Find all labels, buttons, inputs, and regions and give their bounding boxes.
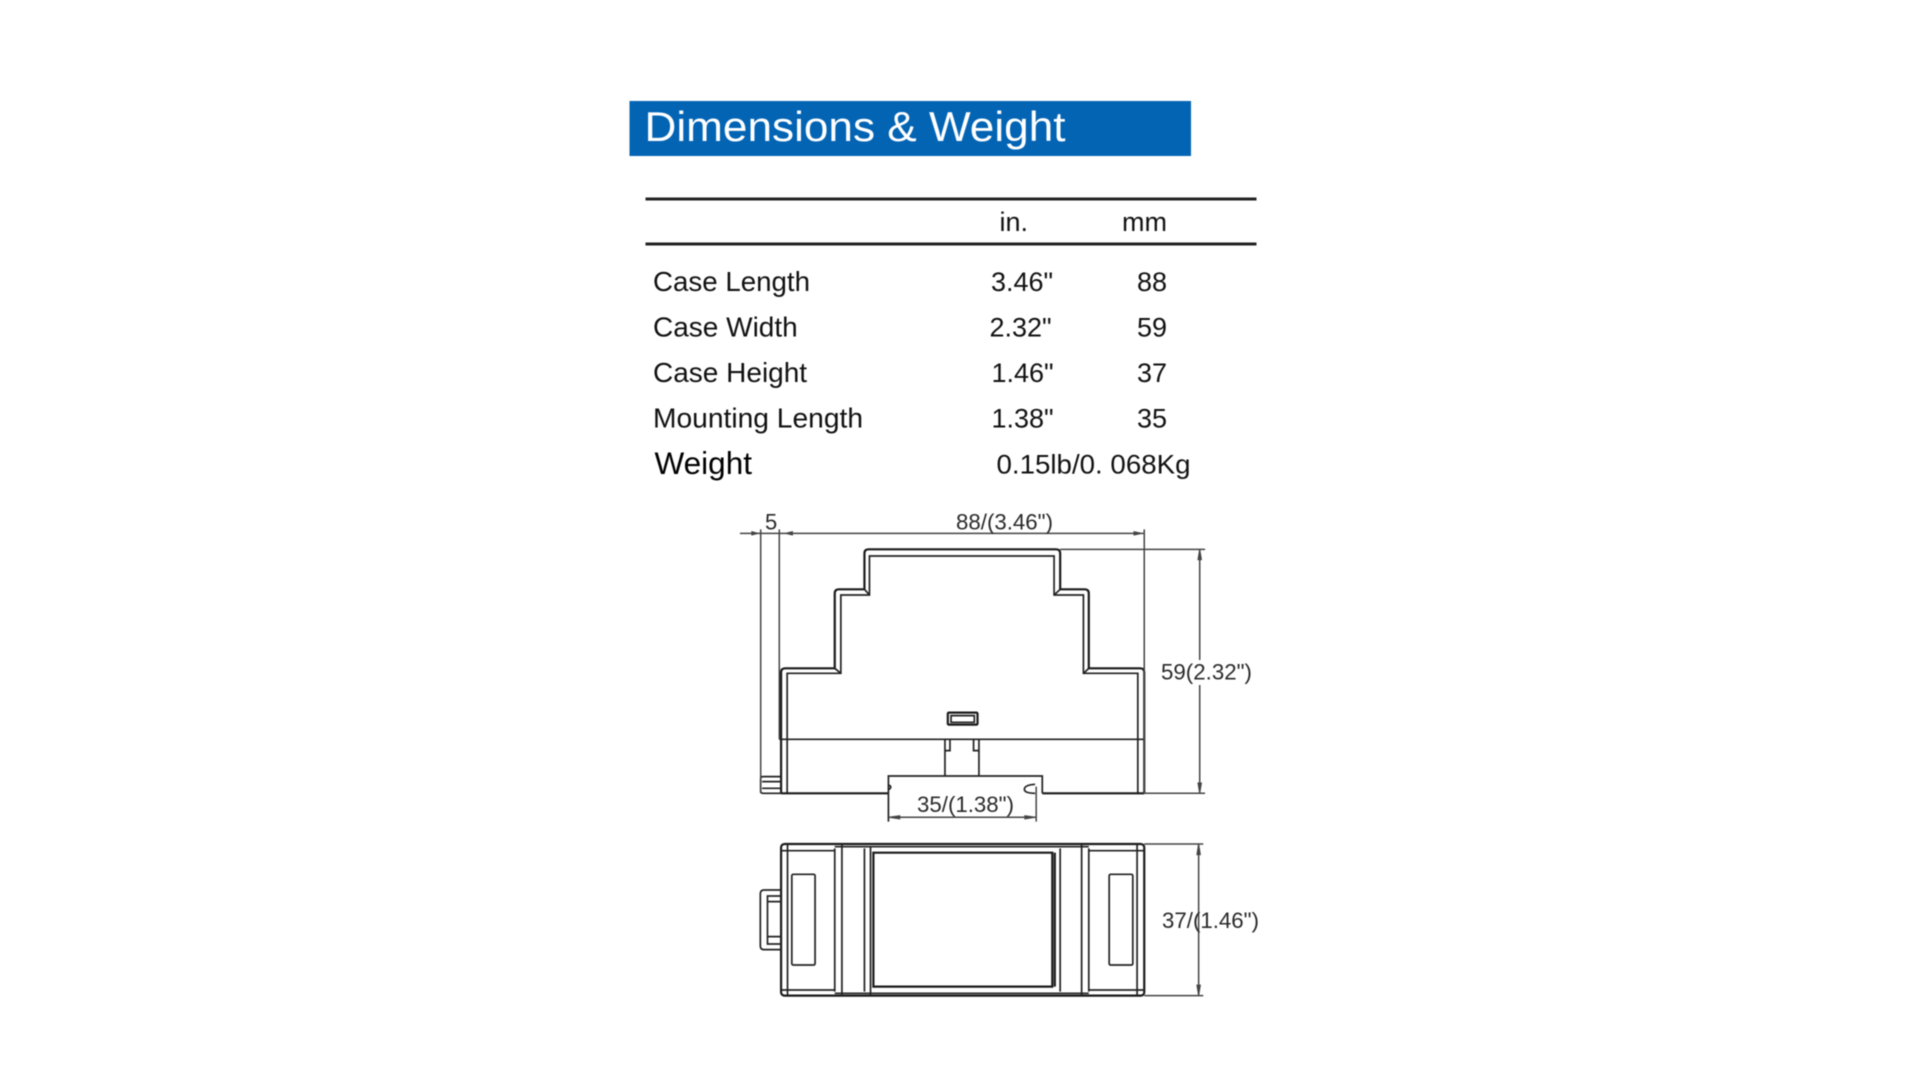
dimension labels front: 35/(1.38") [917,792,1014,817]
row: weight: Weight [654,445,752,481]
left tab [760,890,781,950]
title banner [630,101,1191,156]
row: case length: 88 [1137,267,1167,297]
slot [948,713,978,725]
row: case height [653,357,1167,388]
center band [835,848,1089,992]
row: case height: 1.46" [992,358,1054,388]
table header [1000,207,1167,237]
base lines [781,792,1144,794]
dimension labels front: 5 [765,510,777,534]
front view drawing [740,510,1252,822]
row: case width [653,312,1167,342]
row: weight [654,445,1190,481]
dimension lines [1144,844,1203,996]
row: mounting length: 35 [1137,404,1167,434]
case outline [781,844,1144,996]
row: case width: 59 [1137,312,1167,342]
table header: in. [1000,207,1028,237]
row: case height: Case Height [653,357,807,388]
stem [945,739,979,776]
row: case length: 3.46" [991,267,1053,297]
dimension labels front: 59(2.32") [1161,660,1252,684]
dimension labels front: 88/(3.46") [956,510,1053,534]
dimension labels front [765,510,1252,817]
windows [792,874,815,965]
row: mounting length: Mounting Length [653,402,863,434]
case outline [781,549,1144,793]
row: case length: Case Length [653,266,810,297]
row: case width: 2.32" [990,312,1052,342]
title banner: Dimensions & Weight [644,103,1066,150]
row: case height: 37 [1137,358,1167,388]
row: case width: Case Width [653,312,798,342]
table header: mm [1122,207,1167,237]
din clip [888,776,1042,822]
row: mounting length: 1.38" [992,404,1054,434]
row: mounting length [653,402,1167,434]
dimension label top: 37/(1.46") [1162,908,1259,933]
dimensions table [646,198,1256,481]
row: case length [653,266,1167,297]
row: weight: 0.15lb/0. 068Kg [996,450,1190,480]
dimension lines [740,529,1205,822]
left tab [761,777,781,793]
top view drawing [760,844,1259,996]
